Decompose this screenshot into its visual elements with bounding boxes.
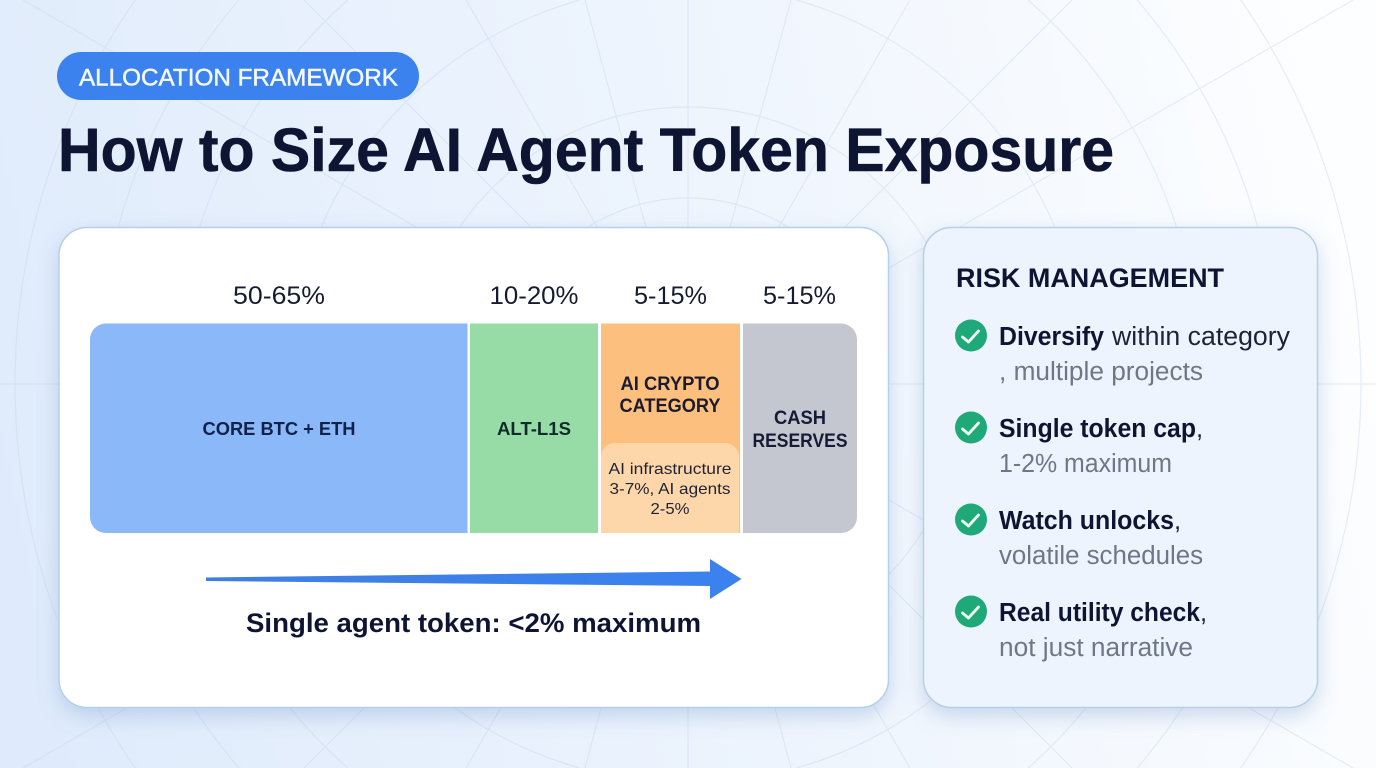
title: How to Size AI Agent Token Exposure: [58, 116, 1114, 184]
segment: core BTC + ETH: [90, 324, 468, 533]
segment: alt-L1s: ALT-L1S: [497, 418, 571, 439]
item: single token cap: [955, 412, 1203, 478]
arrow: [206, 559, 742, 599]
item: real utility check: Real utility check: [999, 599, 1201, 627]
segment: alt-L1s: [470, 324, 598, 533]
segment: cash reserves: RESERVES: [752, 431, 848, 452]
item: diversify: Diversify: [999, 323, 1105, 351]
icon: check: [955, 596, 987, 628]
item: diversify: , multiple projects: [999, 358, 1203, 386]
panel: allocation chart: [59, 228, 888, 708]
item: single token cap: Single token cap: [999, 415, 1196, 443]
item: watch unlocks: ,: [1174, 507, 1181, 535]
segment: cash reserves: [743, 324, 857, 533]
sub-segment: AI infrastructure and agents: 3-7%, AI agents: [610, 481, 730, 498]
segment: core BTC + ETH: CORE BTC + ETH: [202, 418, 356, 439]
icon: check: [955, 320, 987, 352]
arrow caption: Single agent token: <2% maximum: [246, 608, 701, 638]
badge: allocation framework: ALLOCATION FRAMEWORK: [79, 64, 399, 91]
percentage labels: 5-15%: [763, 282, 836, 310]
badge: allocation framework: [57, 52, 419, 100]
sub-segment: AI infrastructure and agents: [601, 443, 739, 533]
item: single token cap: ,: [1196, 415, 1203, 443]
percentage labels: 5-15%: [634, 282, 707, 310]
icon: check: [955, 412, 987, 444]
panel heading: RISK MANAGEMENT: [956, 263, 1224, 293]
item: diversify: within category: [1111, 323, 1290, 351]
segment: cash reserves: CASH: [774, 408, 826, 429]
icon: check: [955, 504, 987, 536]
item: watch unlocks: Watch unlocks: [999, 507, 1174, 535]
sub-segment: AI infrastructure and agents: AI infrastructure: [608, 461, 732, 478]
percentage labels: 10-20%: [490, 282, 578, 310]
segment: AI crypto category: [601, 324, 740, 533]
segment: AI crypto category: AI CRYPTO: [620, 374, 720, 395]
panel: risk management: [924, 228, 1318, 708]
percentage labels: 50-65%: [233, 282, 325, 310]
item: real utility check: not just narrative: [999, 634, 1193, 662]
percentage labels: [233, 282, 836, 310]
item: real utility check: [955, 596, 1207, 662]
item: diversify: [955, 320, 1290, 386]
sub-segment: AI infrastructure and agents: 2-5%: [650, 501, 690, 518]
item: watch unlocks: volatile schedules: [999, 542, 1203, 570]
item: watch unlocks: [955, 504, 1203, 570]
segment: AI crypto category: CATEGORY: [620, 396, 721, 417]
item: real utility check: ,: [1200, 599, 1207, 627]
item: single token cap: 1-2% maximum: [999, 450, 1172, 478]
